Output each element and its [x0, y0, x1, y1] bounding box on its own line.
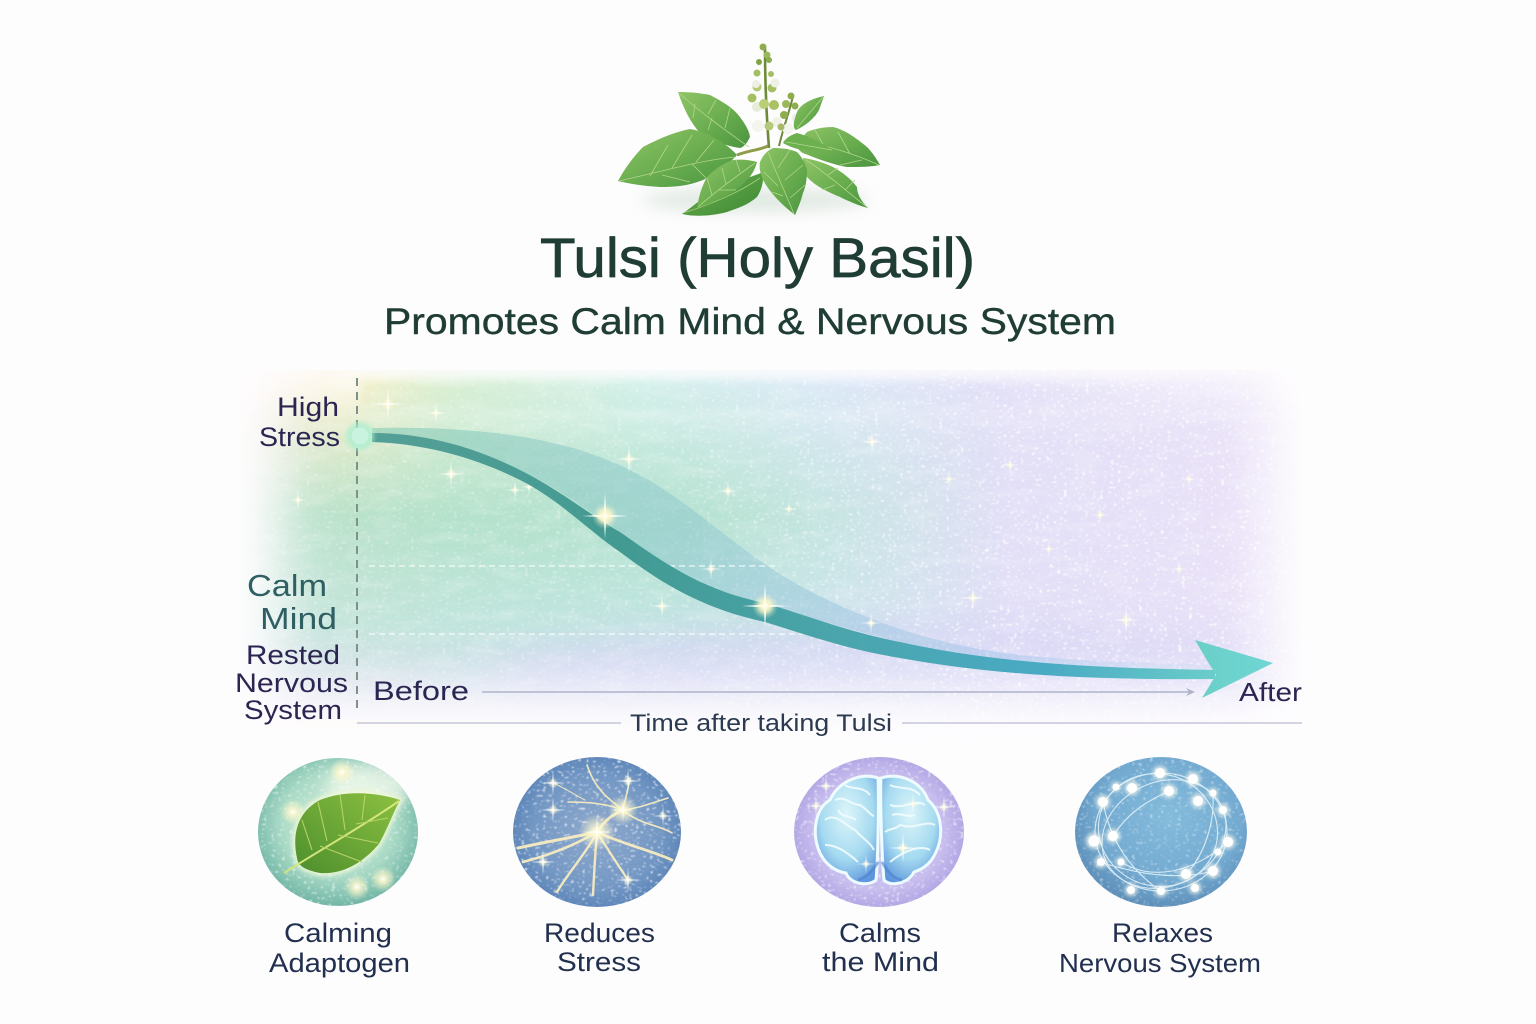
icon: relaxes nervous system network orb [1075, 757, 1247, 908]
leaf: left large [618, 129, 737, 187]
label: high stress: High [277, 392, 339, 422]
leaf: lower right [803, 158, 868, 208]
leaf: center [760, 148, 807, 215]
x axis line [357, 722, 1302, 724]
sparkles on chart [288, 388, 1198, 634]
white flowers [737, 117, 794, 155]
label: calms the mind: the Mind [822, 947, 939, 977]
time arrow [482, 688, 1195, 696]
leaf: right inner [783, 133, 833, 151]
chart background wash [252, 370, 1283, 710]
subtitle: Promotes Calm Mind & Nervous System [384, 301, 1116, 342]
label: calms the mind [822, 918, 939, 977]
icon: reduces stress neuron orb [513, 757, 681, 907]
leaf: right rear [795, 127, 880, 167]
main decline curve [372, 433, 1215, 679]
label: reduces stress [544, 918, 655, 977]
icon: tulsi plant [618, 44, 880, 216]
sparkles on curve [582, 493, 788, 629]
chart: stress over time [235, 370, 1320, 737]
leaf: upper right small [794, 96, 824, 130]
label: calming adaptogen: Adaptogen [269, 948, 410, 978]
leaf: front left [697, 160, 757, 208]
label: calm mind [247, 568, 337, 636]
label: calms the mind: Calms [839, 918, 921, 948]
icon: calms the mind brain orb [794, 757, 964, 907]
label: calm mind: Calm [247, 568, 327, 603]
label: high stress: Stress [259, 422, 340, 452]
label: reduces stress: Stress [557, 947, 641, 977]
label: rested nervous system: Nervous [235, 668, 348, 698]
leaf [284, 793, 400, 873]
x axis label: Time after taking Tulsi [630, 710, 892, 737]
brain [815, 776, 941, 884]
label: rested nervous system [235, 640, 348, 725]
leaf: upper left [678, 92, 750, 148]
label: rested nervous system: System [244, 695, 342, 725]
upper curve band [372, 428, 1215, 670]
label: high stress [259, 392, 340, 452]
label: reduces stress: Reduces [544, 918, 655, 948]
label: calming adaptogen [269, 918, 410, 978]
leaf: lower back [682, 172, 763, 216]
icon: calming adaptogen leaf orb [258, 758, 418, 906]
label: rested nervous system: Rested [246, 640, 340, 670]
label: relaxes nervous system [1059, 918, 1261, 978]
start point [346, 422, 374, 450]
label: relaxes nervous system: Nervous System [1059, 948, 1261, 978]
label: before: Before [373, 676, 469, 706]
flower stem [730, 44, 800, 148]
label: after: After [1239, 677, 1302, 707]
label: calming adaptogen: Calming [284, 918, 392, 948]
dashed guide lines [369, 566, 830, 634]
label: relaxes nervous system: Relaxes [1112, 918, 1213, 948]
arrowhead [1195, 640, 1273, 698]
title: Tulsi (Holy Basil) [540, 226, 975, 289]
y axis [356, 378, 358, 712]
label: calm mind: Mind [260, 601, 337, 636]
